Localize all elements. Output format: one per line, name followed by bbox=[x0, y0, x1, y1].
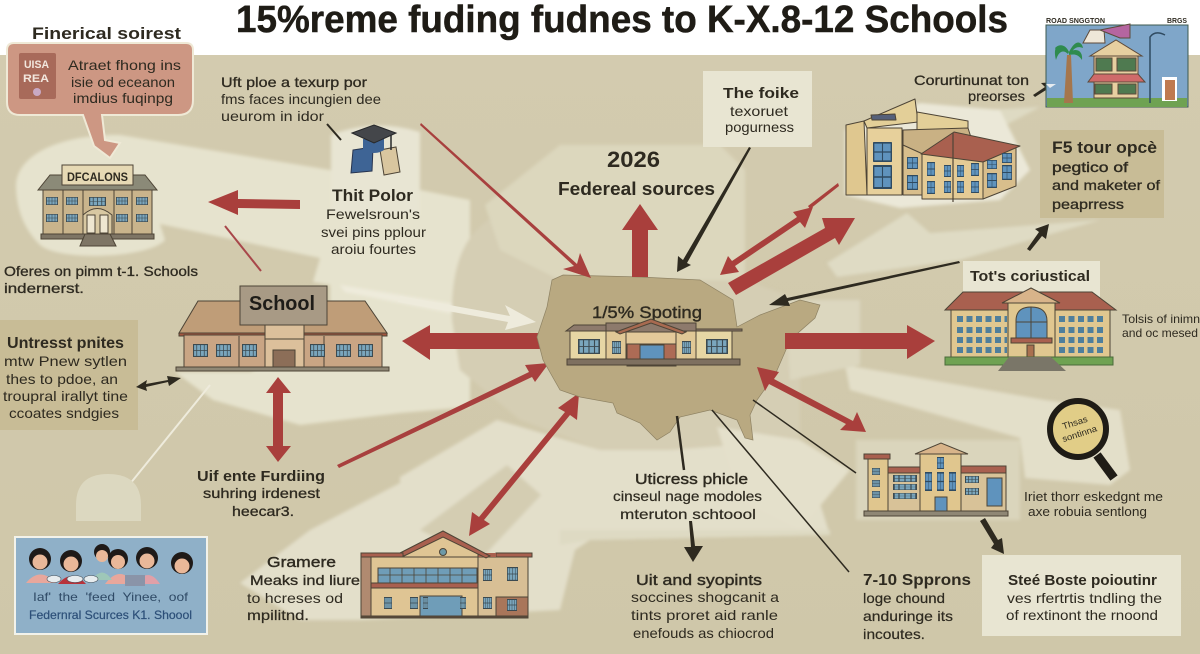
arrow: big red right bbox=[785, 325, 935, 359]
text: funding: heecar3. bbox=[232, 503, 294, 519]
panel: the fork: pogurness bbox=[725, 119, 794, 135]
text: centre note bbox=[613, 471, 762, 522]
icon: USA badge bbox=[19, 53, 56, 99]
text: magnifier caption bbox=[1024, 489, 1163, 519]
panel: interest points: ccoates sndgies bbox=[9, 405, 119, 421]
panel: house card: ROAD SNGGTON bbox=[1046, 18, 1105, 25]
text: 7-10 sponsors: 7-10 Spprons bbox=[863, 572, 971, 589]
panel: state boost bbox=[982, 555, 1181, 636]
callout: financial sources: Atraet fhong ins bbox=[68, 57, 181, 73]
panel: total curiosity label bbox=[963, 261, 1100, 297]
arrow: black to map from label bbox=[769, 261, 960, 306]
school: right lower building bbox=[864, 443, 1008, 516]
text: magnifier caption: axe robuia sentlong bbox=[1028, 504, 1147, 519]
text: grammar note: Gramere bbox=[267, 554, 336, 571]
text: continuation note bbox=[914, 72, 1029, 104]
panel: the fork bbox=[703, 71, 812, 147]
text: funding: suhring irdenest bbox=[203, 485, 320, 501]
text: map label: 1/5% Spoting bbox=[592, 303, 702, 322]
icon: magnifying glass: Thsas bbox=[1061, 414, 1089, 431]
school: left building: DFCALONS bbox=[67, 170, 128, 184]
icon: graduation cap and books bbox=[351, 125, 400, 175]
text: supports bbox=[631, 572, 779, 641]
school: bottom building bbox=[361, 531, 532, 618]
panel: F5 tour: and maketer of bbox=[1052, 177, 1160, 193]
icon: magnifying glass bbox=[1050, 401, 1114, 478]
text: grammar note bbox=[247, 554, 360, 623]
text: grammar note: to hcreses od bbox=[247, 590, 343, 606]
panel: F5 tour: pegtico of bbox=[1052, 159, 1128, 175]
map: USA with central school bbox=[537, 275, 820, 440]
heading: 2026 federal sources bbox=[558, 147, 715, 199]
arrow: red double to angled building bbox=[720, 183, 839, 275]
text: continuation note: preorses bbox=[968, 88, 1025, 104]
panel: interest points bbox=[0, 320, 138, 430]
text: 7-10 sponsors: loge chound bbox=[863, 590, 945, 606]
arrow: black down to Steé Boste bbox=[980, 518, 1004, 554]
panel: third policy text: Fewelsroun's bbox=[326, 206, 420, 222]
panel: interest points: thes to pdoe, an bbox=[6, 371, 118, 387]
icon: group of people bbox=[26, 544, 193, 586]
panel: interest points: Untresst pnites bbox=[7, 335, 124, 352]
text: grammar note: Meaks ind liure bbox=[250, 572, 360, 588]
text: funding bbox=[197, 468, 325, 519]
text: supports: soccines shogcanit a bbox=[631, 589, 779, 605]
text: centre note: mteruton schtoool bbox=[620, 506, 756, 522]
panel: people card bbox=[15, 537, 207, 634]
text: centre note: cinseul nage modoles bbox=[613, 488, 762, 504]
panel: house card bbox=[1046, 18, 1188, 107]
text: supports: Uit and syopints bbox=[636, 572, 762, 589]
panel: total curiosity label: Tot's coriustical bbox=[970, 268, 1090, 285]
arrow: black down to supports bbox=[684, 521, 703, 562]
panel: the fork: texoruet bbox=[730, 103, 788, 119]
school: angled building bbox=[846, 99, 1020, 202]
panel: F5 tour: peaprress bbox=[1052, 196, 1124, 212]
text: 7-10 sponsors: anduringe its bbox=[863, 608, 953, 624]
text: 7-10 sponsors: incoutes. bbox=[863, 626, 925, 642]
arrow: red double to bottom school bbox=[469, 393, 579, 536]
arrow: up from map bbox=[622, 204, 658, 277]
title: 15%reme fuding fudnes to K-X.8-12 Schools bbox=[236, 0, 1008, 41]
text: magnifier caption: Iriet thorr eskedgnt me bbox=[1024, 489, 1163, 504]
arrow: map to central school bbox=[402, 325, 540, 360]
panel: state boost: ves rfertrtis tndling the bbox=[1007, 590, 1162, 606]
icon: USA badge: UISA bbox=[24, 59, 49, 71]
panel: the fork: The foike bbox=[723, 85, 799, 102]
panel: F5 tour bbox=[1040, 130, 1164, 218]
callout: financial sources bbox=[7, 24, 193, 158]
arrow: big red to angled building bbox=[728, 218, 855, 295]
panel: interest points: mtw Pnew sytlen bbox=[4, 353, 127, 369]
text: campus side note bbox=[1122, 312, 1200, 340]
panel: third policy text: Thit Polor bbox=[332, 186, 413, 205]
arrow: white pointer to map bbox=[398, 296, 536, 330]
text: centre note: Uticress phicle bbox=[635, 471, 748, 488]
school: main centre-left building bbox=[176, 286, 389, 371]
icon: palm tree bbox=[1055, 42, 1083, 103]
text: top-left note: fms faces incungien dee bbox=[221, 91, 381, 107]
text: continuation note: Corurtinunat ton bbox=[914, 72, 1029, 88]
heading: 2026 federal sources: Federeal sources bbox=[558, 179, 715, 199]
school: main centre-left building: School bbox=[249, 293, 315, 315]
icon: house bbox=[1083, 24, 1145, 98]
callout: financial sources: imdius fuqinpg bbox=[73, 90, 173, 106]
school: left building bbox=[38, 165, 157, 246]
text: campus side note: Tolsis of inimn bbox=[1122, 312, 1200, 326]
arrow: to left school bbox=[208, 190, 300, 215]
text: 7-10 sponsors bbox=[863, 572, 971, 642]
arrow: black up to F5 panel bbox=[1027, 224, 1049, 251]
school: right campus bbox=[945, 288, 1116, 371]
arrow: black double pointer bbox=[136, 376, 181, 391]
text: top-left note bbox=[221, 74, 381, 124]
panel: state boost: of rextinont the rnoond bbox=[1006, 607, 1158, 623]
lines: black connectors from map bbox=[677, 400, 856, 572]
panel: third policy text bbox=[321, 186, 426, 257]
arrow: red double map to right school bbox=[757, 367, 866, 432]
text: top-left note: ueurom in idor bbox=[221, 108, 324, 124]
panel: people card: Iaf' the 'feed Yinee, oof bbox=[33, 590, 189, 604]
icon: USA badge: REA bbox=[23, 73, 49, 85]
panel: house card: BRGS bbox=[1167, 18, 1187, 25]
arrow: black to house card bbox=[1033, 82, 1056, 97]
text: supports: tints proret aid ranle bbox=[631, 607, 778, 623]
callout: financial sources: isie od eceanon bbox=[71, 74, 175, 90]
arrow: vertical double funding bbox=[266, 377, 291, 462]
panel: F5 tour: F5 tour opcè bbox=[1052, 138, 1157, 157]
callout: financial sources: Finerical soirest bbox=[32, 24, 181, 43]
panel: state boost: Steé Boste poioutinr bbox=[1008, 572, 1157, 589]
panel: interest points: troupral irallyt tine bbox=[3, 388, 128, 404]
school: in map bbox=[566, 319, 742, 366]
arrow: thin red to map bbox=[337, 363, 549, 468]
arrow: black from fork to map bbox=[677, 147, 751, 272]
arrow: thin red to map top bbox=[420, 123, 591, 278]
text: campus side note: and oc mesed bbox=[1122, 326, 1198, 340]
arrow: white line to dome bbox=[76, 385, 210, 521]
panel: people card: Federnral Scurces K1. Shoool bbox=[29, 608, 192, 622]
text: funding: Uif ente Furdiing bbox=[197, 468, 325, 485]
text: top-left note: Uft ploe a texurp por bbox=[221, 74, 367, 90]
heading: 2026 federal sources: 2026 bbox=[607, 147, 660, 172]
icon: magnifying glass: sontinna bbox=[1061, 423, 1098, 444]
text: supports: enefouds as chiocrod bbox=[633, 625, 774, 641]
text: left school caption bbox=[4, 263, 198, 296]
text: left school caption: Oferes on pimm t-1. Schools bbox=[4, 263, 198, 279]
text: left school caption: indernerst. bbox=[4, 280, 84, 296]
panel: third policy text: svei pins pplour bbox=[321, 224, 426, 240]
text: grammar note: mpilitnd. bbox=[247, 607, 309, 623]
panel: third policy text: aroiu fourtes bbox=[331, 241, 416, 257]
